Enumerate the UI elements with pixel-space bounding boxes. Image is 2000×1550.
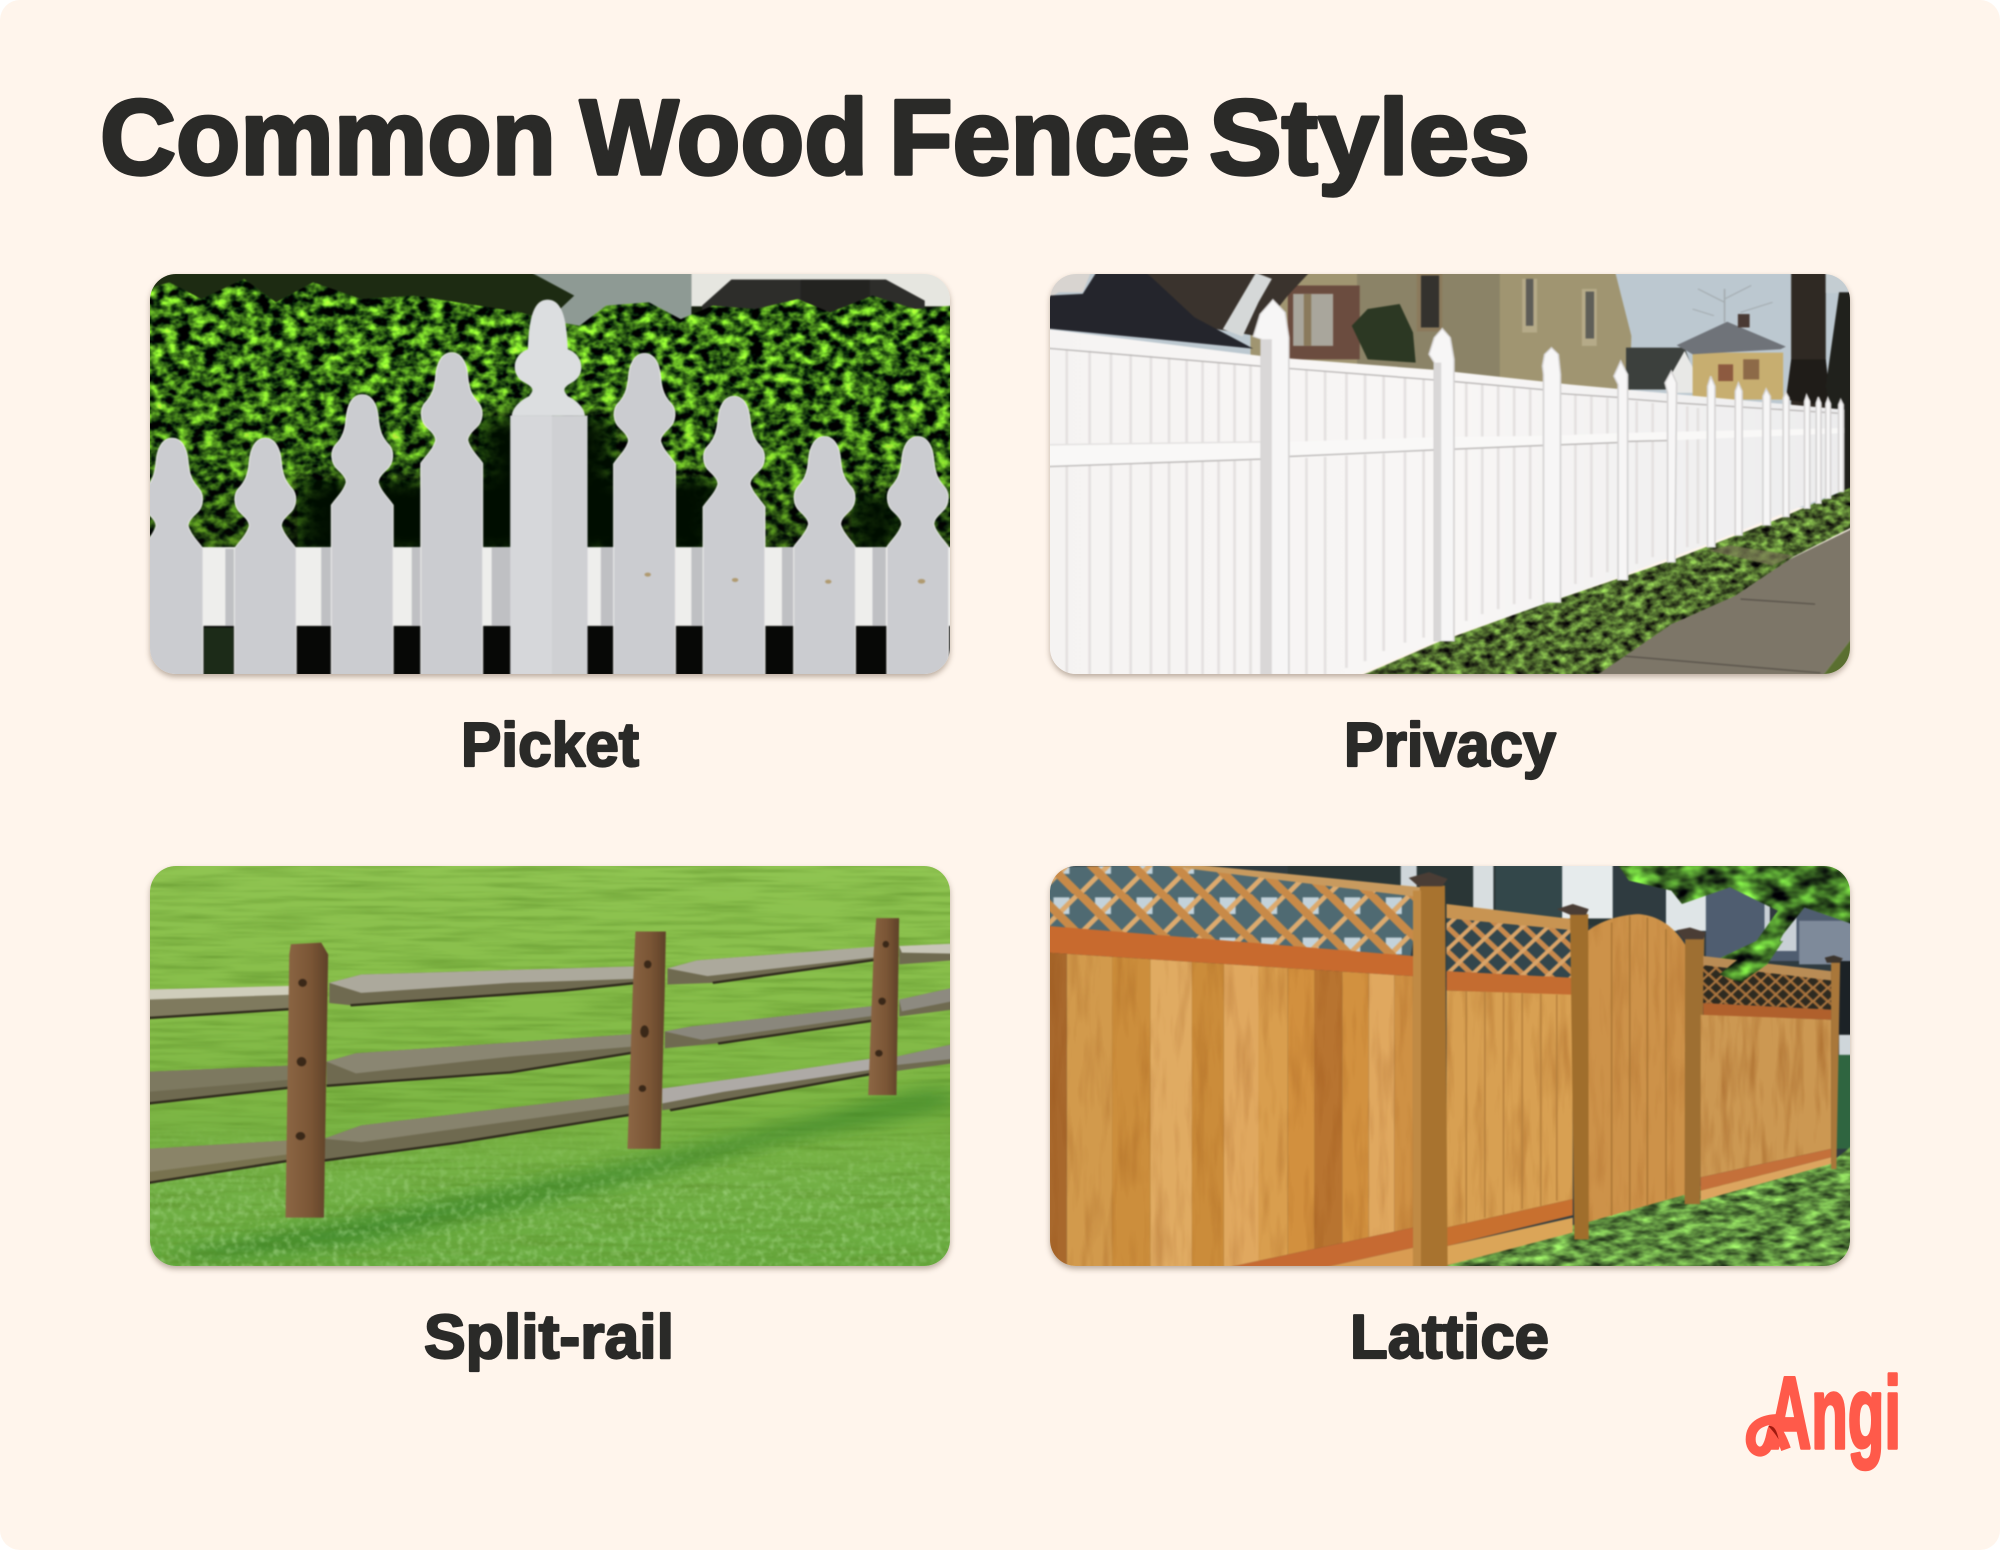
panel: picket fence photo	[150, 274, 950, 674]
posts	[1253, 300, 1843, 675]
shadow under fence	[169, 1082, 952, 1259]
grass strip	[1362, 487, 1852, 675]
pale grass and clover	[150, 1140, 950, 1266]
title: Fence	[889, 77, 1190, 197]
boards panel 1	[1048, 951, 1420, 1270]
title	[100, 77, 1530, 197]
label: split-rail: Split-rail	[424, 1303, 674, 1372]
posts	[1418, 886, 1448, 1267]
panel: privacy fence photo	[1050, 274, 1850, 674]
title: Styles	[1209, 77, 1530, 197]
rails	[148, 944, 952, 1182]
post and finial	[510, 416, 588, 675]
gate	[1584, 914, 1688, 1223]
label: lattice: Lattice	[1350, 1303, 1549, 1372]
panel: lattice fence photo	[1050, 866, 1850, 1266]
label: privacy: Privacy	[1344, 711, 1556, 780]
logo: Angi	[1751, 1356, 1901, 1470]
pickets	[141, 353, 949, 773]
fence pickets lines	[1067, 349, 1698, 675]
logo: Angi: Angi	[1768, 1356, 1901, 1470]
tree leaves	[1618, 865, 1852, 981]
horizontal rails	[1048, 428, 1844, 467]
posts	[286, 943, 328, 1218]
vinyl fence body	[1048, 329, 1844, 675]
rail	[148, 547, 952, 626]
lattice panel 1	[1048, 865, 1421, 958]
dark trees and roof	[1147, 273, 1309, 336]
title: Common	[100, 77, 556, 197]
house behind	[1288, 865, 1613, 925]
shrub	[1836, 1055, 1852, 1149]
title: Wood	[580, 77, 868, 197]
neighbouring house	[1251, 273, 1631, 393]
panel: split-rail fence photo	[150, 866, 950, 1266]
label: picket: Picket	[461, 711, 639, 780]
far houses	[1626, 348, 1695, 389]
panel 2	[1447, 917, 1573, 978]
lawn	[1442, 1145, 1852, 1267]
tree trunks	[1791, 273, 1826, 414]
sidewalk	[1591, 529, 1852, 675]
panel 3	[1703, 964, 1831, 1010]
